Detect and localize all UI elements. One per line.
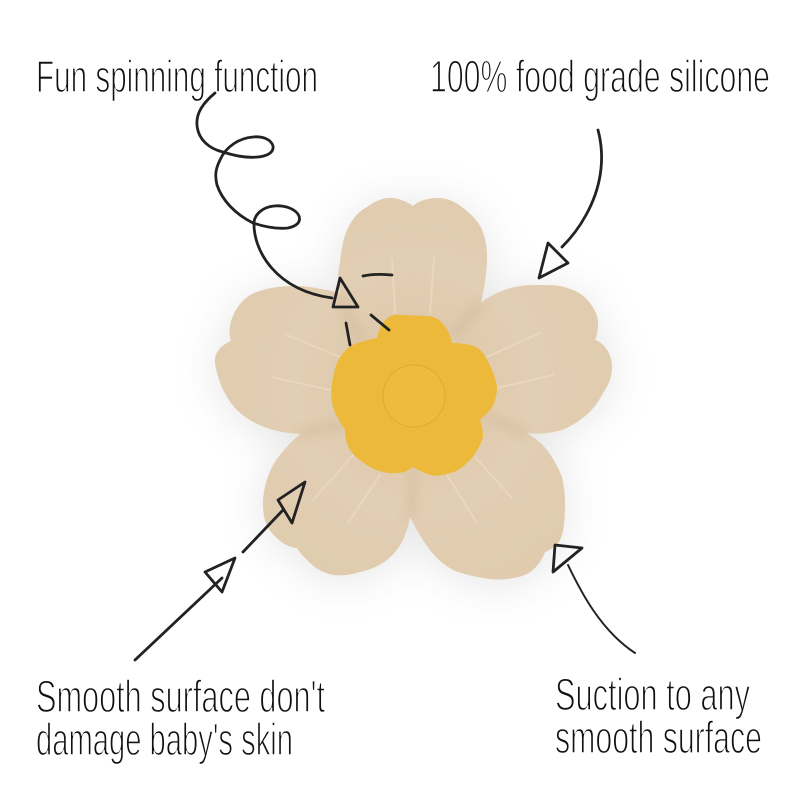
label: suction to any smooth surface: [555, 669, 762, 763]
arrow: looping spin arrow: [197, 93, 392, 345]
arrow: to smooth surface petal: [135, 482, 305, 660]
arrow: to suction edge: [553, 545, 635, 653]
label: fun spinning function: Fun spinning function: [36, 51, 318, 102]
flower petals: [215, 198, 612, 580]
petal ridges: [272, 257, 553, 523]
yellow centre button: [383, 365, 445, 427]
petal creases: [300, 293, 527, 517]
product: flower toy: [215, 198, 612, 584]
label: smooth surface skin line 1 and 2: [36, 671, 325, 765]
label: smooth surface skin line 1 and 2: damage baby's skin: [36, 714, 293, 765]
label: smooth surface skin line 1 and 2: Smooth surface don't: [36, 671, 325, 722]
arrow: to silicone petal: [539, 130, 602, 278]
yellow flower centre: [331, 315, 497, 476]
